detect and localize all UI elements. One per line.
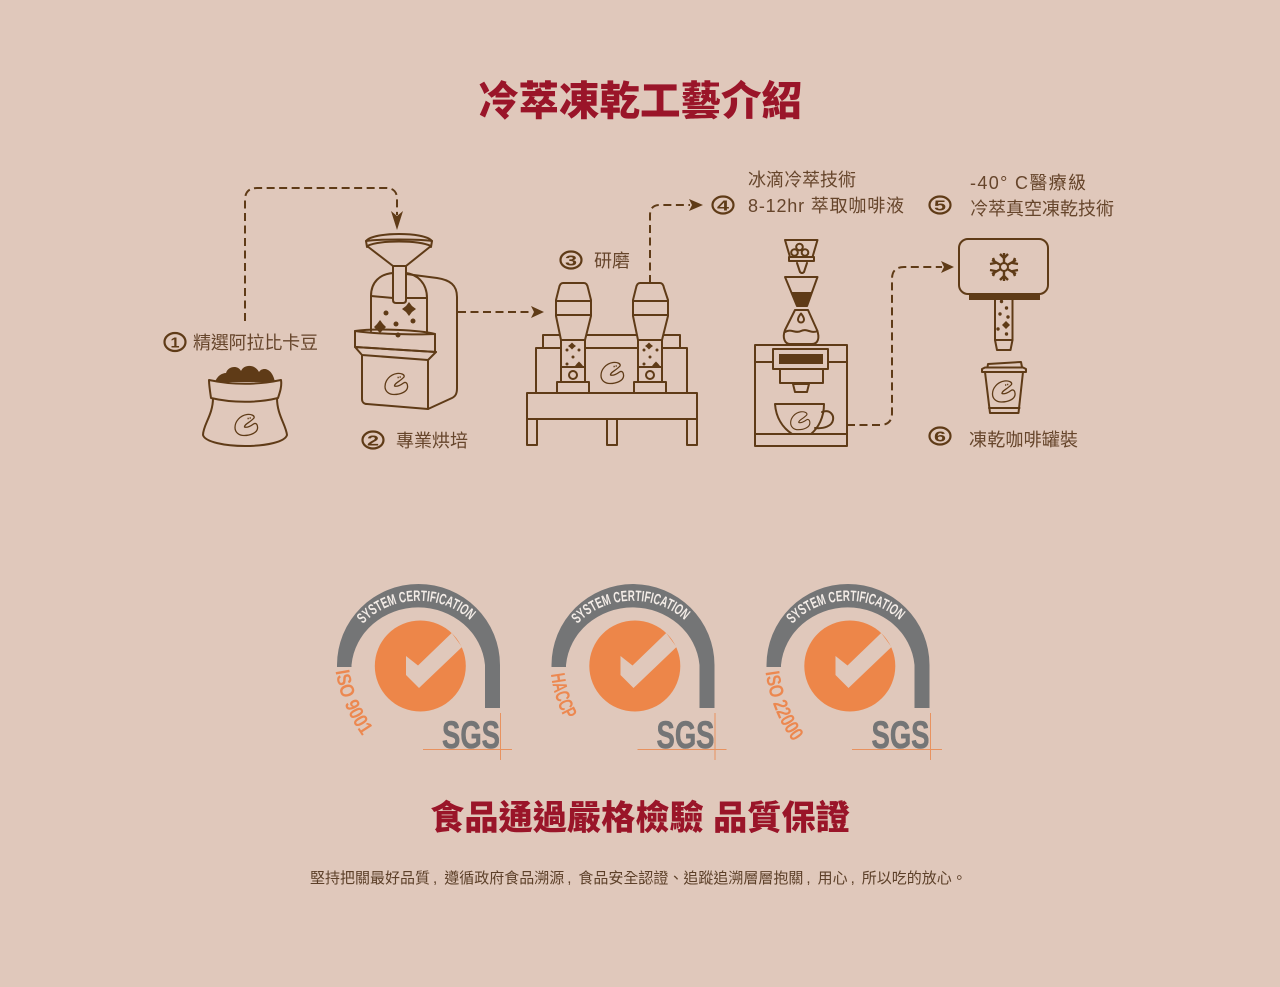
badge: ISO 22000: SYSTEM CERTIFICATION <box>786 590 906 623</box>
step 6 label: 6 <box>934 428 946 446</box>
icon: extraction machine and cup <box>755 345 847 446</box>
badge: ISO 22000 <box>766 584 942 760</box>
arrow: step 2 to step 3 <box>458 306 544 318</box>
step 5 label: 冷萃真空凍乾技術 <box>970 199 1114 219</box>
heading: quality assurance: 食品通過嚴格檢驗 品質保證 <box>430 798 850 838</box>
badge: ISO 9001 <box>336 584 512 760</box>
icon: brand mark on coffee cup <box>992 381 1015 402</box>
badge: ISO 22000: ISO 22000 <box>766 671 803 740</box>
icon: freeze dryer <box>959 239 1048 350</box>
step 5 label: -40° C醫療級 <box>970 173 1086 193</box>
step 1 label: 1 <box>170 334 180 352</box>
step 5 label: 5 <box>934 198 946 214</box>
icon: roaster machine <box>355 234 457 409</box>
step 4 label: 冰滴冷萃技術 <box>748 170 856 190</box>
badge: ISO 9001: ISO 9001 <box>336 670 372 736</box>
step 2 label <box>362 431 468 451</box>
step 3 label: 3 <box>565 252 577 270</box>
badge: HACCP: SGS <box>656 714 714 757</box>
body text: 堅持把關最好品質, 遵循政府食品溯源, 食品安全認證、追蹤追溯層層抱關, 用心, 所以吃的放心。 <box>310 869 967 887</box>
step 3 label <box>560 251 630 271</box>
badge: HACCP: SYSTEM CERTIFICATION <box>572 590 691 623</box>
icon: right grinder <box>633 283 668 393</box>
step 2 label: 2 <box>367 432 379 450</box>
icon: snowflake <box>990 253 1018 281</box>
icon: coffee bean sack <box>203 366 287 446</box>
badge: HACCP: HACCP <box>551 673 576 716</box>
arrow: step 1 to step 2 <box>245 188 403 321</box>
arrow: step 3 to step 4 <box>650 199 703 283</box>
step 4 label <box>712 170 904 216</box>
icon: freeze-dried coffee cup <box>982 362 1026 413</box>
arrow: step 4 to step 5 <box>847 261 954 425</box>
badge: ISO 9001: SGS <box>442 714 500 757</box>
icon: left grinder <box>556 283 591 393</box>
step 6 label <box>930 428 1078 450</box>
step 2 label: 專業烘培 <box>396 431 468 451</box>
badge: ISO 9001: SYSTEM CERTIFICATION <box>357 590 476 623</box>
icon: brand mark on cup <box>791 412 810 430</box>
badge: HACCP <box>551 584 726 760</box>
step 5 label <box>930 173 1114 219</box>
step 4 label: 4 <box>717 198 730 214</box>
icon: brand mark on grinder <box>601 362 624 384</box>
step 4 label: 8-12hr 萃取咖啡液 <box>748 196 904 216</box>
step 3 label: 研磨 <box>594 251 630 271</box>
icon: brand mark on roaster <box>385 373 408 394</box>
icon: cold drip tower <box>784 240 818 344</box>
icon: grinder station <box>527 283 697 445</box>
icon: brand mark on sack <box>235 414 258 436</box>
title: 冷萃凍乾工藝介紹 <box>478 78 802 124</box>
badge: ISO 22000: SGS <box>872 714 930 757</box>
step 6 label: 凍乾咖啡罐裝 <box>969 430 1078 450</box>
step 1 label: 精選阿拉比卡豆 <box>193 333 318 353</box>
